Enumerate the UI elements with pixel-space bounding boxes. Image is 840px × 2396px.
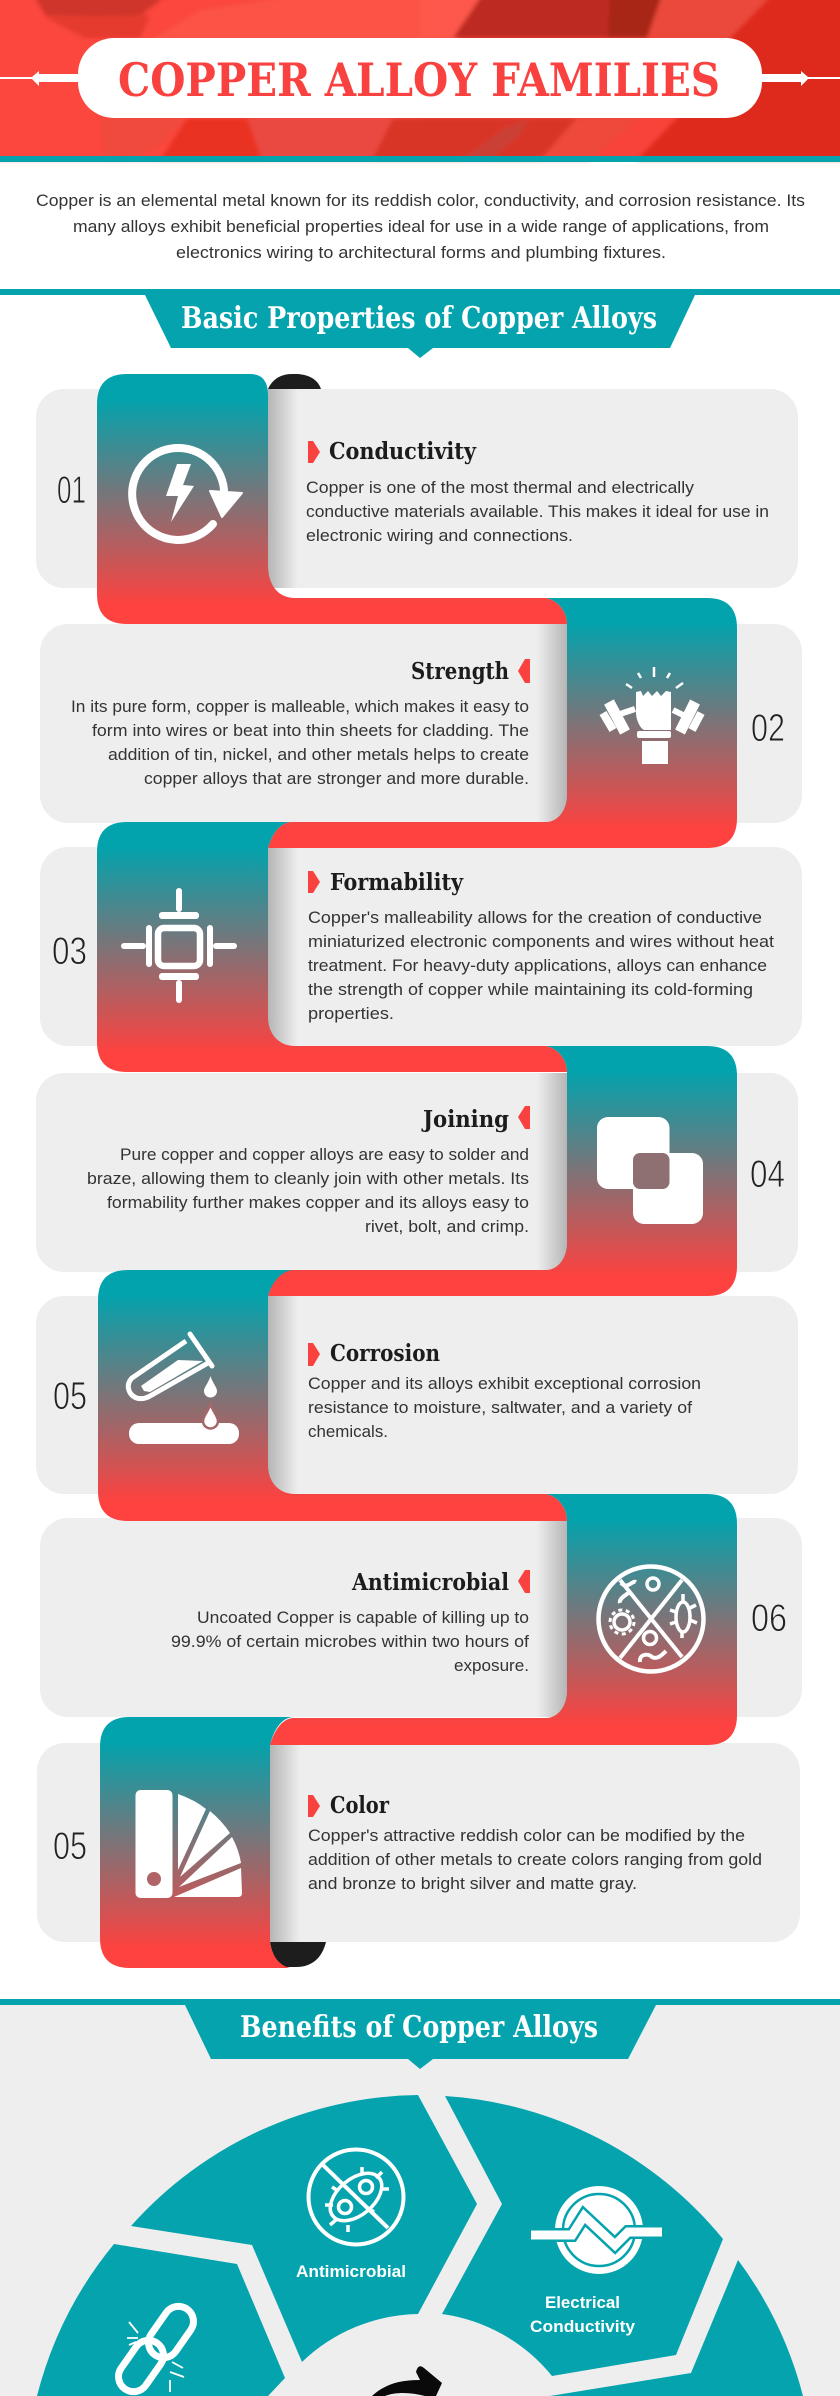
ribbon 02 xyxy=(268,598,737,848)
section heading: benefits: Benefits of Copper Alloys xyxy=(240,2010,598,2045)
icon: chain link xyxy=(113,2300,199,2396)
number 05: 05 xyxy=(53,1375,87,1418)
panel: formability: miniaturized electronic components and wires without heat xyxy=(308,932,774,951)
panel: joining: braze, allowing them to cleanly join with other metals. Its xyxy=(87,1169,529,1188)
panel: conductivity xyxy=(306,438,769,545)
number 05 repeat: 05 xyxy=(53,1825,87,1868)
teal header rule xyxy=(0,156,840,162)
number 04: 04 xyxy=(750,1153,785,1196)
panel: joining: formability further makes copper and its alloys easy to xyxy=(107,1193,529,1212)
panel: joining: rivet, bolt, and crimp. xyxy=(365,1217,529,1236)
icon: fist and dumbbell xyxy=(603,667,701,764)
section heading: basic properties xyxy=(145,295,695,358)
header banner xyxy=(0,0,840,160)
section rule xyxy=(0,289,840,295)
panel: antimicrobial: exposure. xyxy=(454,1656,529,1675)
panel: corrosion: resistance to moisture, saltwater, and a variety of xyxy=(308,1398,692,1417)
title pill xyxy=(78,38,762,118)
title pill: COPPER ALLOY FAMILIES xyxy=(118,53,720,107)
wheel segment: electrical conductivity xyxy=(442,2096,723,2376)
panel: strength: addition of tin, nickel, and other metals helps to create xyxy=(108,745,529,764)
ribbon 07 xyxy=(100,1717,294,1968)
panel: antimicrobial xyxy=(171,1569,530,1675)
panel: antimicrobial: 99.9% of certain microbes within two hours of xyxy=(171,1632,529,1651)
panel: joining xyxy=(87,1106,530,1236)
icon: microbes crossed circle xyxy=(598,1566,704,1672)
panel: strength: form into wires or beat into thin sheets for cladding. The xyxy=(92,721,529,740)
panel: color xyxy=(308,1792,762,1893)
panel: corrosion: chemicals. xyxy=(308,1422,388,1441)
ribbon 05 xyxy=(98,1270,567,1521)
panel: formability: Copper's malleability allows for the creation of conductive xyxy=(308,908,762,927)
panel: strength: In its pure form, copper is malleable, which makes it easy to xyxy=(71,697,529,716)
panel: antimicrobial: Uncoated Copper is capable of killing up to xyxy=(197,1608,529,1627)
panel: corrosion: Corrosion xyxy=(330,1340,440,1367)
panel: color: addition of other metals to create colors ranging from gold xyxy=(308,1850,762,1869)
icon: resistor circle xyxy=(531,2186,662,2274)
number 06: 06 xyxy=(751,1597,787,1640)
panel: strength xyxy=(71,658,530,788)
label: electrical conductivity xyxy=(530,2293,636,2336)
panel: conductivity: electronic wiring and connections. xyxy=(306,526,573,545)
label: electrical conductivity: Conductivity xyxy=(530,2317,636,2336)
intro paragraph xyxy=(36,191,805,262)
ribbon 03 xyxy=(97,822,567,1072)
panel: conductivity: Copper is one of the most thermal and electrically xyxy=(306,478,695,497)
icon: test tube and drops xyxy=(128,1334,239,1444)
panel: formability: treatment. For heavy-duty applications, alloys can enhance xyxy=(308,956,767,975)
panel: strength: Strength xyxy=(411,658,509,685)
panel: formability xyxy=(308,869,774,1023)
icon: circuit component xyxy=(121,888,237,1003)
ribbon 06 xyxy=(270,1494,737,1745)
panel: joining: Joining xyxy=(421,1106,509,1133)
panel: corrosion: Copper and its alloys exhibit exceptional corrosion xyxy=(308,1374,701,1393)
intro paragraph: many alloys exhibit beneficial properties ideal for use in a wide range of applications, from xyxy=(73,217,769,236)
panel: formability: the strength of copper while maintaining its cold-forming xyxy=(308,980,753,999)
ribbon bottom fold xyxy=(270,1942,326,1967)
panel: formability: properties. xyxy=(308,1004,394,1023)
number 02: 02 xyxy=(751,707,785,750)
label: antimicrobial: Antimicrobial xyxy=(296,2262,406,2281)
icon: overlapping squares xyxy=(597,1117,703,1224)
panel backgrounds xyxy=(36,389,802,1942)
number 03: 03 xyxy=(52,930,87,973)
icon: crossed bacteria xyxy=(308,2150,404,2244)
icon: lightning cycle xyxy=(132,448,242,540)
wheel segment: right xyxy=(550,2260,803,2396)
panel: color: and bronze to bright silver and matte gray. xyxy=(308,1874,637,1893)
right ornament arrow xyxy=(760,71,840,86)
intro paragraph: electronics wiring to architectural forms and plumbing fixtures. xyxy=(176,243,666,262)
benefits rule xyxy=(0,1999,840,2005)
panel: joining: Pure copper and copper alloys are easy to solder and xyxy=(120,1145,529,1164)
label: electrical conductivity: Electrical xyxy=(545,2293,620,2312)
panel: color: Color xyxy=(330,1792,390,1819)
panel: conductivity: conductive materials available. This makes it ideal for use in xyxy=(306,502,769,521)
ribbon 04 xyxy=(268,1046,737,1296)
section heading: basic properties: Basic Properties of Copper Alloys xyxy=(181,301,657,336)
icon: colour swatch fan xyxy=(136,1790,242,1898)
ribbon 01 xyxy=(97,374,567,624)
panel: color: Copper's attractive reddish color can be modified by the xyxy=(308,1826,745,1845)
section heading: benefits xyxy=(185,2005,656,2069)
panel: formability: Formability xyxy=(330,869,464,896)
benefits background xyxy=(0,2005,840,2396)
wheel segment: antimicrobial xyxy=(131,2095,477,2362)
wheel segment: left strength xyxy=(37,2244,285,2396)
panel: conductivity: Conductivity xyxy=(329,438,477,465)
ribbon top fold xyxy=(268,374,321,389)
number 01: 01 xyxy=(57,469,86,512)
intro paragraph: Copper is an elemental metal known for its reddish color, conductivity, and corrosion resistance. Its xyxy=(36,191,805,210)
panel: strength: copper alloys that are stronger and more durable. xyxy=(144,769,529,788)
panel inner shadows xyxy=(268,389,567,1942)
panel: corrosion xyxy=(308,1340,701,1441)
panel: antimicrobial: Antimicrobial xyxy=(351,1569,509,1596)
left ornament arrow xyxy=(0,71,80,86)
center arrow xyxy=(372,2366,442,2396)
